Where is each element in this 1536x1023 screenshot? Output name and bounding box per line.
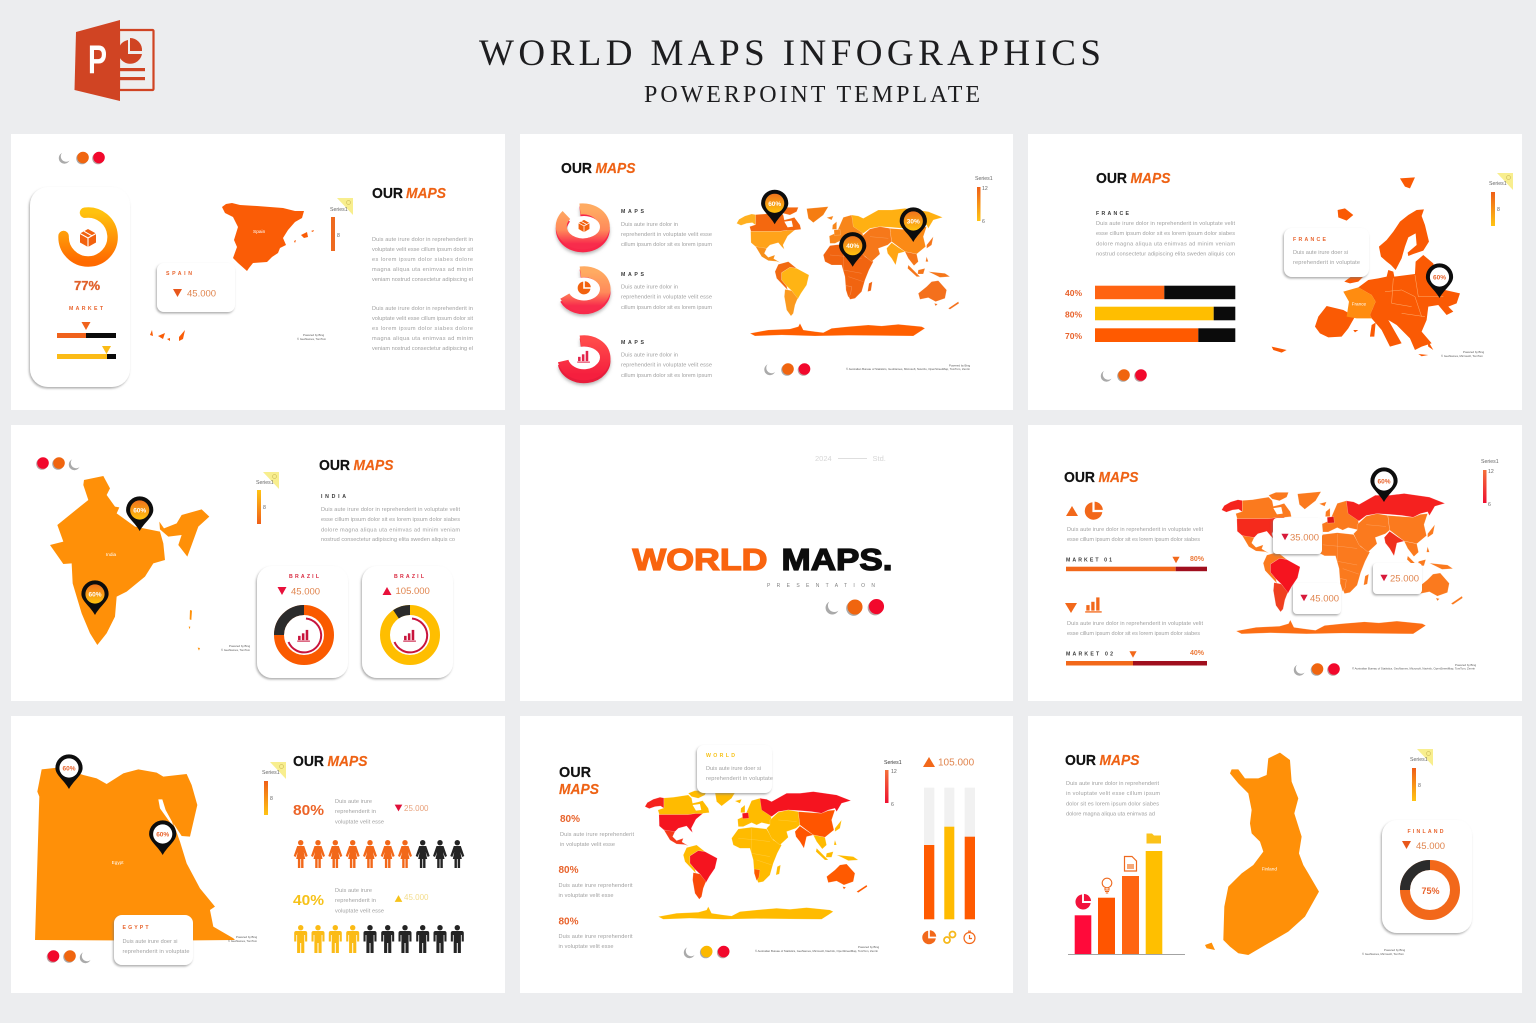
stat 40%: Duis aute irure [335, 888, 372, 894]
legend: Series1: 6 [1488, 502, 1491, 508]
callout 35.000 [1273, 518, 1322, 554]
icon: document [1124, 856, 1136, 871]
text block: es lorem ipsum dolor siabes dolore [372, 257, 473, 263]
date row: Std. [872, 454, 886, 463]
heading: MAPS [354, 457, 394, 474]
value 105.000: 105.000 [938, 758, 975, 768]
callout: World: Duis aute irure doer si [706, 766, 761, 772]
pin 30% [900, 207, 927, 242]
text block [1096, 211, 1235, 258]
callout: Spain [157, 263, 235, 312]
map source note: Powered by Bing [236, 935, 258, 939]
stat 40%: 40% [293, 892, 324, 909]
stat 3: 80% [558, 916, 579, 928]
heading: MAPS [559, 781, 599, 798]
bar chart [1065, 286, 1235, 342]
text block: FRANCE [1096, 211, 1130, 217]
pin 60%: 60% [156, 832, 169, 838]
panel: Egypt [11, 716, 505, 993]
legend: Series1: 12 [1488, 469, 1494, 475]
legend: Series1 [884, 760, 902, 808]
stat 2: Duis aute irure reprehenderit [558, 883, 633, 889]
heading: OUR [372, 185, 403, 202]
ring icon 2 [565, 272, 605, 309]
pin 60%: 60% [768, 201, 781, 208]
map source note: © Australian Bureau of Statistics, GeoNames, Microsoft, Navinfo, OpenStreetMap, TomTom, Zenrin [846, 367, 970, 371]
legend: Series1 [262, 762, 286, 815]
date row [815, 454, 886, 463]
map source note [755, 945, 880, 953]
text block: dolore magna aliqua uta enimvas ad minim veniam [321, 528, 460, 534]
pin 60% [1426, 263, 1453, 298]
legend: Series1: Series1 [1410, 757, 1428, 763]
map: Egypt [35, 767, 235, 941]
bar chart [1068, 851, 1185, 955]
text block [321, 494, 460, 543]
map: Finland: Finland [1262, 867, 1277, 872]
stat 80%: reprehenderit in [335, 809, 376, 815]
text block: Duis aute irure dolor in reprehenderit in [372, 237, 473, 243]
pin 60% [1370, 467, 1398, 502]
legend: Series1: Series1 [1481, 459, 1499, 465]
map source note: Powered by Bing [1384, 948, 1406, 952]
navigation dots [826, 599, 884, 616]
bar chart: 80% [1065, 310, 1082, 320]
market card [30, 187, 130, 387]
heading [319, 457, 394, 474]
pin 60% [81, 580, 109, 615]
stat 2: 80% [558, 865, 579, 876]
ring icon 3 [563, 341, 605, 378]
legend: Series1: 8 [270, 796, 273, 802]
legend: Series1: 6 [891, 802, 894, 808]
text block: in voluptate velit esse cillum ipsum [1066, 791, 1160, 797]
pin 60% [55, 754, 83, 789]
legend: Series1 [975, 176, 993, 225]
pin 60%: 60% [1433, 274, 1446, 282]
heading [561, 160, 636, 177]
heading: OUR [1064, 469, 1095, 486]
map source note: © GeoNames, Microsoft, TomTom [1441, 354, 1484, 358]
callout 45.000 [1293, 583, 1341, 614]
navigation dots [47, 950, 93, 963]
text block [1066, 781, 1160, 818]
legend: Series1: Series1 [256, 480, 274, 486]
icon: timer [964, 931, 975, 944]
callout: France: Duis aute irure doer si [1293, 250, 1348, 256]
text block: dolore magna aliqua uta enimvas ad minim veniam [1096, 242, 1235, 248]
text block: Duis aute irure dolor in reprehenderit in voluptate velit [1096, 221, 1235, 227]
map source note [228, 935, 258, 943]
navigation dots [684, 945, 730, 958]
card: Brazil 45.000: 45.000 [291, 586, 320, 598]
navigation dots [1101, 369, 1147, 382]
text block: magna aliqua uta enimvas ad minim [372, 336, 473, 342]
market label: MARKET [69, 306, 104, 312]
text block: veniam nostrud consectetur adipiscing el [372, 277, 473, 283]
callout 35.000: 35.000 [1290, 532, 1319, 544]
title: WORLD MAPS INFOGRAPHICS [479, 33, 1101, 74]
legend: Series1: Series1 [330, 207, 348, 213]
pin 30%: 30% [907, 218, 920, 226]
ring icon 1 [561, 209, 604, 247]
cover title: MAPS. [782, 542, 892, 577]
stat 2 [558, 865, 633, 899]
cover title [632, 542, 892, 577]
map source note: Powered by Bing [229, 644, 251, 648]
stat 80%: 25.000 [404, 804, 429, 813]
legend: Series1: Series1 [975, 176, 993, 182]
stat 80% [293, 799, 429, 826]
panel: Spain [11, 134, 505, 410]
navigation dots [1294, 663, 1340, 676]
text block 1: reprehenderit in voluptate velit esse [621, 232, 712, 238]
panel: cover [520, 425, 1013, 701]
text block: dolore magna aliqua uta enimvas ad [1066, 812, 1155, 818]
heading: OUR [1065, 752, 1096, 769]
panel: world map with markets [1028, 425, 1522, 701]
map: India: India [106, 552, 116, 557]
market 02: esse cillum ipsum dolor sit es lorem ipsum dolor siabes [1067, 631, 1200, 637]
map: Europe [1272, 177, 1460, 356]
bar chart: 40% [1065, 288, 1082, 298]
pin 60%: 60% [62, 766, 76, 772]
text block: voluptate velit esse cillum ipsum dolor sit [372, 316, 473, 322]
text block: nostrud consectetur adipiscing elita sweden aliquis con [1096, 252, 1235, 258]
legend: Series1: 8 [1418, 783, 1421, 789]
heading [293, 753, 368, 770]
text block [372, 237, 473, 352]
stat 1: in voluptate velit esse [560, 842, 615, 848]
map source note: © GeoNames, TomTom [228, 939, 258, 943]
stat 3 [558, 916, 633, 950]
stat 80%: Duis aute irure [335, 799, 372, 805]
callout: Egypt: Duis aute irure doer si [122, 939, 178, 945]
heading: MAPS [596, 160, 636, 177]
heading [1096, 170, 1170, 187]
percentage: 77% [74, 278, 100, 293]
legend: Series1: 8 [1497, 207, 1500, 213]
map: Egypt: Egypt [112, 860, 124, 865]
bar chart: 70% [1065, 331, 1082, 341]
callout: World [697, 745, 773, 793]
legend: Series1: Series1 [1489, 181, 1507, 187]
text block 1: Duis aute irure dolor in [621, 222, 678, 228]
text block 3 [621, 340, 712, 379]
map: world [1222, 492, 1463, 634]
icon: package [80, 229, 96, 247]
text block: esse cillum ipsum dolor sit es lorem ipsum dolor siabes [321, 517, 460, 523]
market 01: MARKET 01 [1066, 558, 1112, 564]
value 105.000 [923, 757, 975, 768]
text block: nostrud consectetur adipiscing elita sweden aliquis co [321, 537, 455, 543]
legend: Series1 [1489, 173, 1513, 226]
card: Brazil 45.000 [257, 566, 348, 678]
callout 25.000: 25.000 [1390, 574, 1419, 584]
panel: world map with pins [520, 134, 1013, 410]
map source note: Powered by Bing [303, 333, 325, 337]
map source note [846, 364, 971, 371]
heading: MAPS [406, 185, 446, 202]
market 02: MARKET 02 [1066, 652, 1113, 658]
heading: OUR [293, 753, 324, 770]
legend: Series1 [1410, 749, 1433, 801]
market 01: Duis aute irure dolor in reprehenderit in voluptate velit [1067, 527, 1203, 533]
text block 2: Duis aute irure dolor in [621, 284, 678, 290]
icon: PowerPoint logo: P [88, 38, 107, 82]
heading: OUR [559, 764, 591, 781]
map source note [1362, 948, 1406, 956]
pin 60% [761, 190, 788, 224]
card: Brazil 45.000: BRAZIL [289, 574, 320, 580]
text block: esse cillum ipsum dolor sit es lorem ipsum dolor siabes [1096, 231, 1235, 237]
card: Finland [1382, 820, 1472, 933]
heading: MAPS [1130, 170, 1170, 187]
map label: Spain [253, 229, 266, 235]
heading: OUR [319, 457, 350, 474]
navigation dots [59, 151, 105, 164]
text block: magna aliqua uta enimvas ad minim [372, 267, 473, 273]
callout 45.000: 45.000 [1310, 594, 1339, 604]
pin 60%: 60% [1377, 478, 1391, 486]
text block: INDIA [321, 494, 346, 500]
market 02 [1065, 597, 1207, 666]
text block: Duis aute irure dolor in reprehenderit [1066, 781, 1159, 787]
icon: PowerPoint logo [74, 20, 154, 101]
market 01: 80% [1190, 556, 1205, 563]
market bars [57, 322, 116, 359]
cover subtitle: PRESENTATION [767, 583, 875, 589]
map source note: © GeoNames, TomTom [297, 337, 327, 341]
pictogram: 7 of 10 orange [294, 840, 464, 868]
France highlight [1343, 287, 1376, 318]
callout: World: WORLD [706, 753, 735, 759]
map: world [737, 207, 959, 336]
heading: MAPS [328, 753, 368, 770]
heading: MAPS [1098, 469, 1138, 486]
stat 1 [560, 814, 634, 848]
heading [372, 185, 446, 202]
map: India [50, 476, 209, 651]
map source note: © Australian Bureau of Statistics, GeoNames, Microsoft, Navinfo, OpenStreetMap, TomTom, Zenrin [1352, 666, 1475, 670]
pin 60% [149, 820, 176, 855]
card: Finland: FINLAND [1408, 829, 1444, 835]
panel: India [11, 425, 505, 701]
legend: Series1: Series1 [262, 770, 280, 776]
callout: France: FRANCE [1293, 237, 1327, 243]
heading [1065, 752, 1140, 769]
stat 2: in voluptate velit esse [558, 893, 614, 899]
market 01 [1066, 502, 1207, 571]
heading: MAPS [1100, 752, 1140, 769]
icon: folder [1146, 834, 1161, 844]
text block 1: MAPS [621, 209, 645, 215]
panel: Finland [1028, 716, 1522, 993]
pin 40% [839, 232, 866, 267]
stat 40%: voluptate velit esse [335, 908, 384, 914]
text block: dolor sit es lorem ipsum dolor siabes [1066, 802, 1159, 808]
callout: Egypt: reprehenderit in voluptate [122, 949, 190, 955]
pin 60%: 60% [133, 508, 146, 514]
map source note [1441, 350, 1485, 358]
map source note [1352, 663, 1477, 670]
callout: Egypt [114, 915, 193, 965]
legend: Series1: 6 [982, 219, 985, 225]
text block 1 [621, 209, 712, 248]
icon: light bulb [1102, 878, 1112, 893]
pin 60%: 60% [88, 592, 102, 598]
market 02: 40% [1190, 650, 1205, 657]
icon: gears [944, 932, 956, 943]
navigation dots [764, 362, 810, 376]
icon: pie [1075, 894, 1091, 910]
map source note: © GeoNames, TomTom [221, 648, 251, 652]
card: Finland: 75% [1421, 886, 1440, 896]
map source note: © GeoNames, Microsoft, TomTom [1362, 952, 1405, 956]
callout 25.000 [1373, 563, 1422, 594]
text block 3: MAPS [621, 340, 645, 346]
stat 40%: 45.000 [404, 893, 429, 902]
donut progress 77% [64, 213, 113, 262]
legend: Series1 [1481, 459, 1499, 508]
callout: Spain: 45.000 [187, 288, 216, 300]
stat 40% [293, 888, 429, 914]
text block 3: Duis aute irure dolor in [621, 352, 678, 358]
legend: Series1: Series1 [884, 760, 902, 766]
text block: voluptate velit esse cillum ipsum dolor sit [372, 247, 473, 253]
map: Finland [1205, 753, 1319, 955]
heading: OUR [561, 160, 592, 177]
stat 3: in voluptate velit esse [558, 944, 614, 950]
map source note: Powered by Bing [1455, 663, 1477, 667]
icon: pie [922, 930, 936, 944]
card: Brazil 105.000 [362, 566, 453, 678]
legend: Series1: 12 [982, 186, 988, 192]
stat 3: Duis aute irure reprehenderit [558, 934, 633, 940]
map source note [221, 644, 251, 652]
cover title: WORLD [632, 542, 768, 577]
text block 2: reprehenderit in voluptate velit esse [621, 294, 712, 300]
legend: Series1: 8 [337, 233, 340, 239]
card: Finland: 45.000 [1416, 841, 1445, 852]
stat 80%: voluptate velit esse [335, 820, 384, 826]
callout: France: reprehenderit in voluptate [1293, 260, 1360, 266]
stat 1: Duis aute irure reprehenderit [560, 832, 634, 838]
text block 3: cillum ipsum dolor sit es lorem ipsum [621, 373, 712, 379]
pin 60% [126, 496, 153, 531]
text block: veniam nostrud consectetur adipiscing el [372, 346, 473, 352]
market 01: esse cillum ipsum dolor sit es lorem ipsum dolor siabes [1067, 537, 1200, 543]
callout: France [1284, 228, 1369, 277]
stat 80%: 80% [293, 802, 324, 819]
subtitle: POWERPOINT TEMPLATE [644, 82, 980, 108]
stat 1: 80% [560, 814, 580, 825]
callout: Spain: SPAIN [166, 271, 192, 277]
text block: es lorem ipsum dolor siabes dolore [372, 326, 473, 332]
heading: OUR [1096, 170, 1127, 187]
callout: World: reprehenderit in voluptate [706, 776, 773, 782]
text block 1: cillum ipsum dolor sit es lorem ipsum [621, 242, 712, 248]
text block: Duis aute irure dolor in reprehenderit in [372, 306, 473, 312]
column chart [924, 788, 975, 919]
panel: world map with columns [520, 716, 1013, 993]
legend: Series1: 12 [891, 769, 897, 775]
stat 40%: reprehenderit in [335, 898, 376, 904]
legend: Series1 [256, 472, 279, 524]
text block 3: reprehenderit in voluptate velit esse [621, 362, 712, 368]
map source note [297, 333, 327, 341]
navigation dots [36, 457, 82, 470]
heading [1064, 469, 1138, 486]
heading [559, 764, 599, 798]
text block: Duis aute irure dolor in reprehenderit in voluptate velit [321, 507, 460, 513]
card: Brazil 105.000: 105.000 [396, 586, 430, 597]
callout: Egypt: EGYPT [122, 925, 149, 931]
map source note: © Australian Bureau of Statistics, GeoNames, Microsoft, Navinfo, OpenStreetMap, TomTom, Zenrin [755, 949, 878, 953]
text block 2 [621, 272, 712, 311]
legend: Series1 [330, 198, 353, 251]
map: world [645, 790, 867, 919]
map: Europe: France [1352, 301, 1367, 306]
map: Spain [150, 203, 314, 341]
panel: Europe [1028, 134, 1522, 410]
legend: Series1: 8 [263, 505, 266, 511]
map source note: Powered by Bing [1463, 350, 1485, 354]
pin 40%: 40% [846, 243, 859, 250]
card: Brazil 105.000: BRAZIL [394, 574, 425, 580]
pictogram: 4 of 10 yellow [294, 925, 464, 953]
text block 2: cillum ipsum dolor sit es lorem ipsum [621, 305, 712, 311]
date row: 2024 [815, 454, 832, 463]
market 02: Duis aute irure dolor in reprehenderit in voluptate velit [1067, 621, 1203, 627]
text block 2: MAPS [621, 272, 645, 278]
map source note: Powered by Bing [949, 364, 971, 368]
map source note: Powered by Bing [858, 945, 880, 949]
